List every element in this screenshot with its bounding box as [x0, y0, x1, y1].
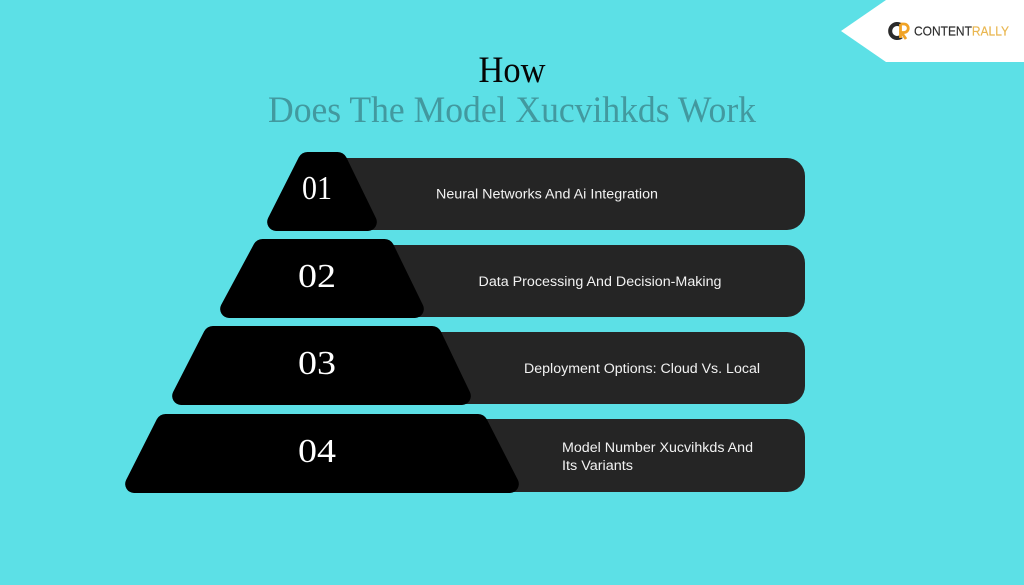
trapezoid: step 2 — [220, 239, 424, 318]
step 2 — [220, 239, 805, 318]
step 1 — [267, 152, 805, 231]
trapezoid: step 3 — [172, 326, 471, 405]
logo wordmark: CONTENTRALLY — [914, 24, 1010, 38]
number: 03: 03 — [298, 345, 336, 382]
number: 01: 01 — [302, 170, 332, 207]
label: step 4: Model Number Xucvihkds And — [562, 440, 753, 455]
label: step 1: Neural Networks And Ai Integration — [436, 186, 658, 202]
step 4 — [125, 414, 805, 493]
logo badge — [841, 0, 1024, 62]
bar: step 4 — [420, 419, 805, 492]
bar: step 1 — [320, 158, 805, 230]
label: step 3: Deployment Options: Cloud Vs. Local — [524, 361, 760, 376]
title — [268, 50, 756, 131]
trapezoid: step 4 — [125, 414, 519, 493]
icon: CR logo mark — [890, 24, 908, 39]
trapezoid: step 1 — [267, 152, 377, 231]
title line 1: How — [478, 50, 546, 91]
title line 2: Does The Model Xucvihkds Work — [268, 90, 756, 131]
bar: step 2 — [340, 245, 805, 317]
label: step 4 — [562, 440, 753, 473]
label: step 4: Its Variants — [562, 458, 633, 473]
step 3 — [172, 326, 805, 405]
label: step 2: Data Processing And Decision-Making — [478, 274, 722, 289]
number: 02: 02 — [298, 258, 336, 295]
number: 04: 04 — [298, 433, 336, 470]
bar: step 3 — [380, 332, 805, 404]
